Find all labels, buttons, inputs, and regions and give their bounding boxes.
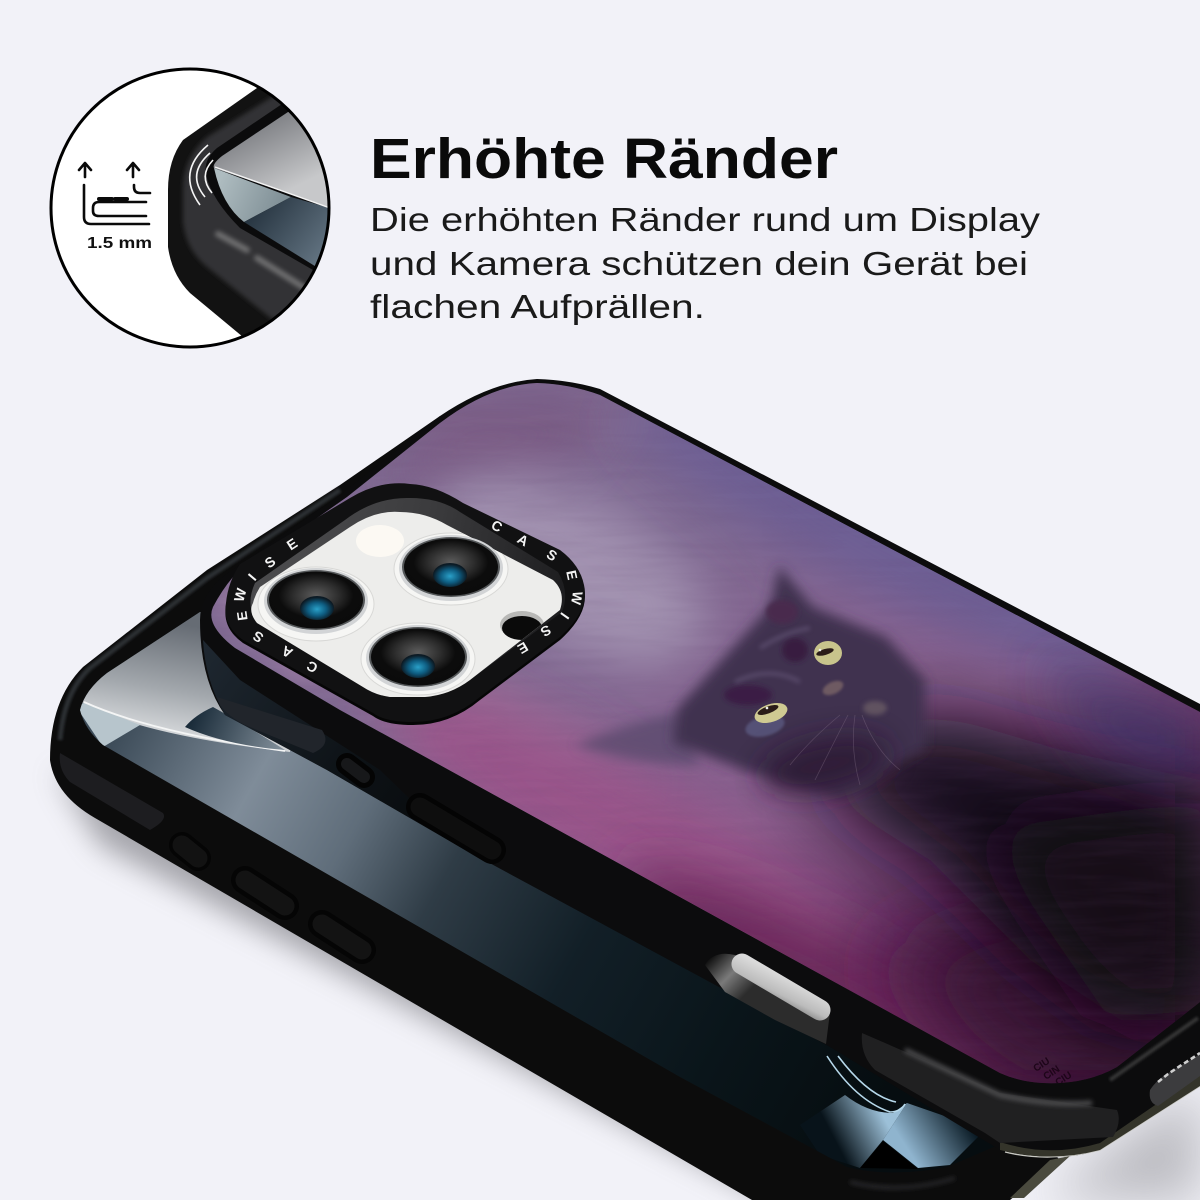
side wall tint	[203, 640, 460, 847]
CASEWISE ring lettering: C	[304, 658, 320, 676]
CASEWISE ring lettering: S	[262, 553, 278, 571]
lens bottom	[366, 625, 470, 691]
small artist mark: CIN	[1042, 1064, 1062, 1083]
camera plate	[251, 512, 562, 697]
grip pad lower right	[862, 1033, 1119, 1143]
canvas streak texture	[1128, 888, 1140, 890]
lens housings	[258, 533, 508, 695]
lower phone side grip	[60, 753, 164, 830]
inset screen dark	[244, 197, 330, 270]
nose	[822, 680, 844, 696]
painted cat artwork panel	[211, 383, 1200, 1084]
CASEWISE ring lettering: I	[557, 610, 573, 622]
bottom right plum wash	[876, 906, 1158, 1082]
brow marks	[724, 685, 772, 705]
camera inner bevel	[250, 498, 565, 697]
painting colour washes	[212, 388, 1200, 1084]
bottom rim silver line	[1005, 1086, 1200, 1157]
description text	[370, 201, 1041, 325]
screen pale blue wedge	[75, 703, 140, 747]
description text: und Kamera schützen dein Gerät bei	[370, 245, 1028, 282]
CASEWISE ring lettering: E	[284, 535, 300, 553]
flash	[356, 525, 404, 557]
description text: flachen Aufprällen.	[370, 288, 705, 325]
camera surround	[225, 483, 586, 725]
CASEWISE ring lettering: S	[250, 628, 266, 646]
inset case corner	[168, 88, 276, 336]
inset screen grey	[214, 112, 330, 208]
CASEWISE ring lettering: C	[489, 517, 505, 535]
lower phone screen	[80, 612, 978, 1169]
inset case inner lighter band	[182, 96, 312, 320]
screen bright curve	[84, 702, 285, 751]
chin darkness	[756, 726, 894, 804]
eye right	[814, 641, 842, 665]
cat	[575, 566, 925, 804]
inset screen bezel	[206, 105, 320, 270]
left ear smear	[575, 712, 700, 765]
CASEWISE ring lettering: A	[279, 643, 295, 661]
CASEWISE ring lettering: A	[515, 531, 531, 549]
CASEWISE ring lettering: E	[515, 639, 531, 657]
dark body mass	[810, 710, 1200, 1020]
bottom rim olive under edge	[1000, 1074, 1200, 1156]
camera outer ring	[225, 483, 585, 722]
CASEWISE ring lettering: W	[568, 590, 586, 607]
whiskers	[790, 715, 900, 785]
impact arcs	[190, 145, 213, 205]
phone shadows on the background	[55, 770, 1200, 1200]
screen dark pocket	[185, 707, 285, 750]
mute button	[182, 845, 198, 858]
lower case frame	[50, 416, 1060, 1200]
icon: raised edge diagram	[79, 163, 150, 224]
volume buttons	[245, 880, 362, 950]
1.5 mm label: 1.5 mm	[87, 235, 152, 252]
lower right metal edge	[1010, 1156, 1070, 1198]
charging port texture	[1150, 1054, 1200, 1106]
description text: Die erhöhten Ränder rund um Display	[370, 201, 1041, 238]
CASEWISE ring lettering	[231, 517, 586, 676]
title: Erhöhte Ränder	[370, 127, 838, 191]
inset button highlights	[218, 234, 303, 287]
ear inside	[764, 600, 796, 622]
CASEWISE ring lettering: S	[544, 546, 560, 564]
lower frame highlights	[850, 1178, 955, 1188]
eye left	[744, 703, 788, 738]
frame highlight	[905, 1050, 1092, 1104]
silver side button	[705, 954, 830, 1044]
lens left	[264, 568, 368, 634]
CASEWISE ring lettering: E	[563, 569, 581, 581]
CASEWISE ring lettering: E	[233, 610, 251, 622]
cat head	[673, 566, 925, 797]
screen grey area	[82, 612, 290, 752]
CASEWISE ring lettering: I	[245, 570, 259, 584]
lower phone in black case	[50, 416, 1070, 1200]
screen light beams	[818, 1095, 907, 1168]
inset circle: raised edge detail	[50, 68, 330, 348]
side buttons upper	[347, 764, 492, 850]
small artist mark	[1034, 1057, 1071, 1083]
CASEWISE ring lettering: S	[538, 622, 554, 640]
upper case frame and side wall	[200, 379, 1200, 1158]
small artist mark: CIU	[1054, 1070, 1074, 1089]
camera bottom depth	[225, 486, 585, 725]
lower frame top highlight	[60, 490, 340, 740]
CASEWISE ring lettering: W	[231, 586, 250, 603]
small artist mark: CIU	[1032, 1056, 1052, 1075]
lens top right	[399, 535, 503, 601]
right indigo wash	[1040, 660, 1200, 790]
rear side grip	[217, 697, 325, 753]
muzzle	[863, 701, 887, 715]
microphone hole	[500, 611, 544, 639]
lighter fur	[735, 628, 810, 682]
inset screen blue	[214, 168, 291, 222]
